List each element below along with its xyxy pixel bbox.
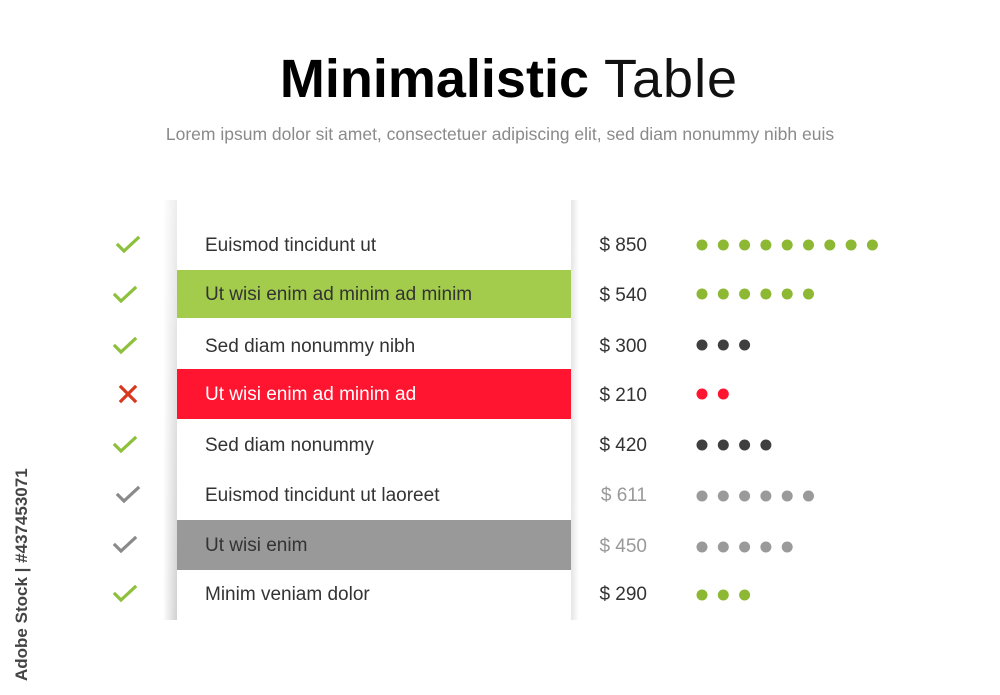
row 1: Euismod tincidunt ut <box>205 235 376 256</box>
prices: $ 300 <box>599 336 647 357</box>
prices: $ 540 <box>599 285 647 306</box>
panel: table <box>177 200 571 620</box>
row 2 green <box>177 270 571 318</box>
row 4 red <box>177 369 571 419</box>
prices: $ 210 <box>599 385 647 406</box>
subtitle: Lorem ipsum dolor sit amet, consectetuer adipiscing elit, sed diam nonummy nibh euis <box>166 124 834 144</box>
row 2 green: Ut wisi enim ad minim ad minim <box>205 284 472 305</box>
title: Minimalistic Table <box>280 49 738 109</box>
row 4 red: Ut wisi enim ad minim ad <box>205 384 416 405</box>
row 6: Euismod tincidunt ut laoreet <box>205 485 439 506</box>
row 5: Sed diam nonummy <box>205 435 374 456</box>
row 3: Sed diam nonummy nibh <box>205 336 415 357</box>
dots <box>696 240 878 600</box>
prices <box>599 235 647 605</box>
prices: $ 850 <box>599 235 647 256</box>
row 8: Minim veniam dolor <box>205 584 370 605</box>
row 7 gray <box>177 520 571 570</box>
row 7 gray: Ut wisi enim <box>205 535 307 556</box>
prices: $ 290 <box>599 584 647 605</box>
icon: checks <box>115 238 138 600</box>
prices: $ 450 <box>599 536 647 557</box>
prices: $ 611 <box>601 485 647 506</box>
prices: $ 420 <box>599 435 647 456</box>
watermark: Adobe Stock | #437453071 <box>12 468 31 681</box>
